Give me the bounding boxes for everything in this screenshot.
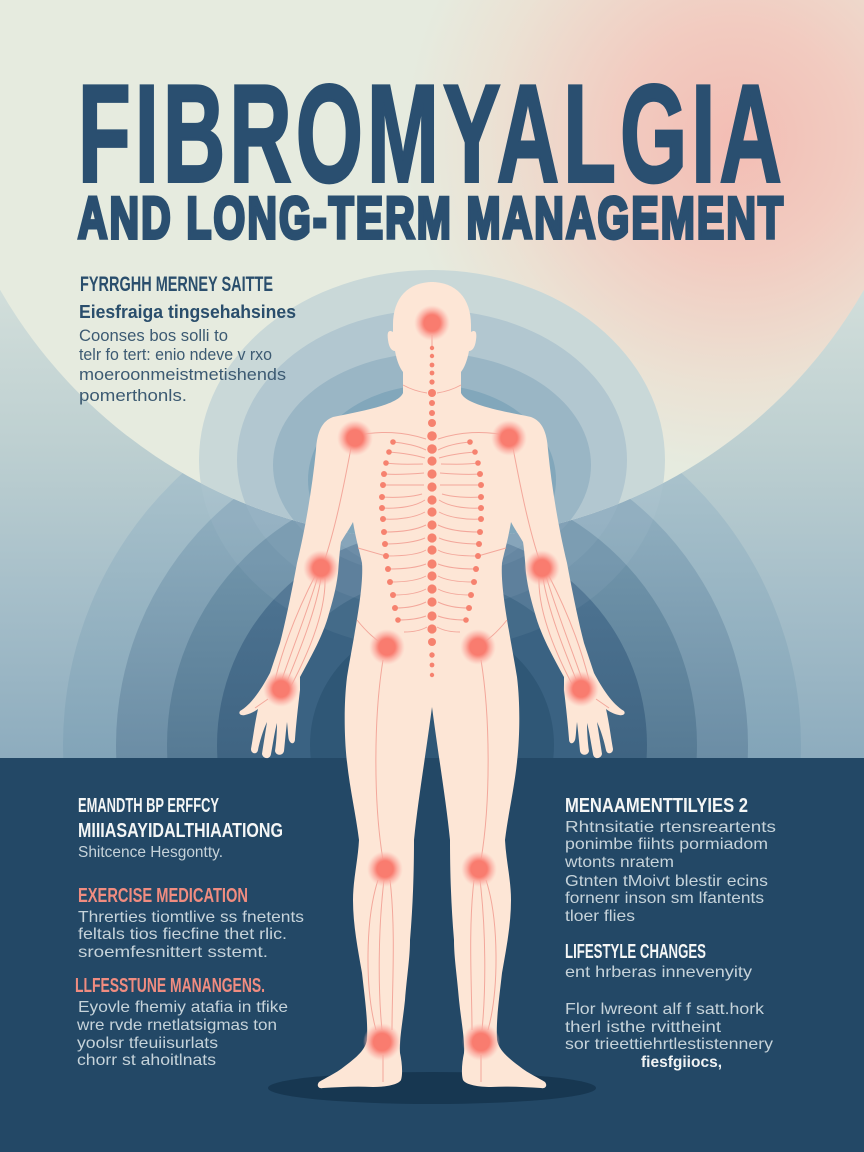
section 3: LLFESSTUNE MANANGENS. [75, 975, 265, 997]
section 1: MIIIASAYIDALTHIAATIONG [78, 820, 283, 842]
intro subheading: Eiesfraiga tingsehahsines [79, 302, 296, 322]
nerve lines [255, 335, 609, 1082]
section 3: wre rvde rnetlatsigmas ton [76, 1017, 277, 1034]
text block: intro [79, 273, 296, 405]
section 2: EXERCISE MEDICATION [78, 885, 248, 907]
section 3: yoolsr tfeuiisurlats [77, 1035, 218, 1052]
background: lower concentric rings [63, 473, 801, 758]
section 1: Shitcence Hesgontty. [78, 844, 223, 861]
section 1: EMANDTH BP ERFFCY [78, 795, 219, 817]
section 4: Gtnten tMoivt blestir ecins [565, 873, 768, 890]
pain points [263, 305, 599, 1061]
section 3: chorr st ahoitlnats [77, 1052, 216, 1069]
section 4: tloer flies [565, 908, 635, 925]
intro body [79, 327, 286, 405]
section 2: sroemfesnittert sstemt. [78, 944, 268, 961]
intro body: moeroonmeistmetishends [79, 366, 286, 384]
section 6 [565, 1001, 773, 1071]
section 2 [78, 885, 304, 961]
ground shadow [268, 1072, 596, 1104]
background: upper concentric rings [199, 270, 665, 534]
background: large pale circle with pink glow [0, 0, 864, 560]
body silhouette [239, 282, 625, 1088]
background: translucent ring overlap [246, 504, 618, 638]
section 4: ponimbe fiihts pormiadom [565, 836, 768, 853]
section 4 [564, 795, 776, 925]
section 5: LIFESTYLE CHANGES [565, 941, 706, 963]
title line 2: AND LONG-TERM MANAGEMENT [78, 186, 783, 251]
human body figure [239, 282, 625, 1088]
text block: left column [75, 795, 304, 1069]
background: gradient sky [0, 0, 864, 758]
section 1 [78, 795, 283, 861]
section 4: MENAAMENTTILYIES 2 [565, 795, 748, 817]
section 5 [565, 941, 752, 981]
section 5: ent hrberas innevenyity [565, 964, 752, 981]
bottom navy panel [0, 758, 864, 1152]
section 3: Eyovle fhemiy atafia in tfike [78, 999, 288, 1016]
section 4: wtonts nratem [564, 854, 674, 871]
section 4: fornenr inson sm lfantents [565, 890, 764, 907]
title line 1: FIBROMYALGIA [78, 55, 782, 212]
section 4: Rhtnsitatie rtensreartents [565, 819, 776, 836]
title [78, 55, 783, 251]
section 6: fiesfgiiocs, [641, 1054, 722, 1071]
intro body: telr fo tert: enio ndeve v rxo [79, 346, 272, 364]
section 3 [75, 975, 288, 1069]
section 2: feltals tios fiecfine thet rlic. [78, 926, 287, 943]
section 6: Flor lwreont alf f satt.hork [565, 1001, 765, 1018]
intro heading: FYRRGHH MERNEY SAITTE [80, 273, 273, 296]
section 2: Threrties tiomtlive ss fnetents [78, 909, 304, 926]
intro body: pomerthonls. [79, 387, 187, 405]
section 6: sor trieettiehrtlestistennery [565, 1036, 773, 1053]
section 6: therl isthe rvittheint [565, 1019, 722, 1036]
spine and rib dots [379, 346, 484, 677]
text block: right column [564, 795, 776, 1071]
intro body: Coonses bos solli to [79, 327, 228, 345]
